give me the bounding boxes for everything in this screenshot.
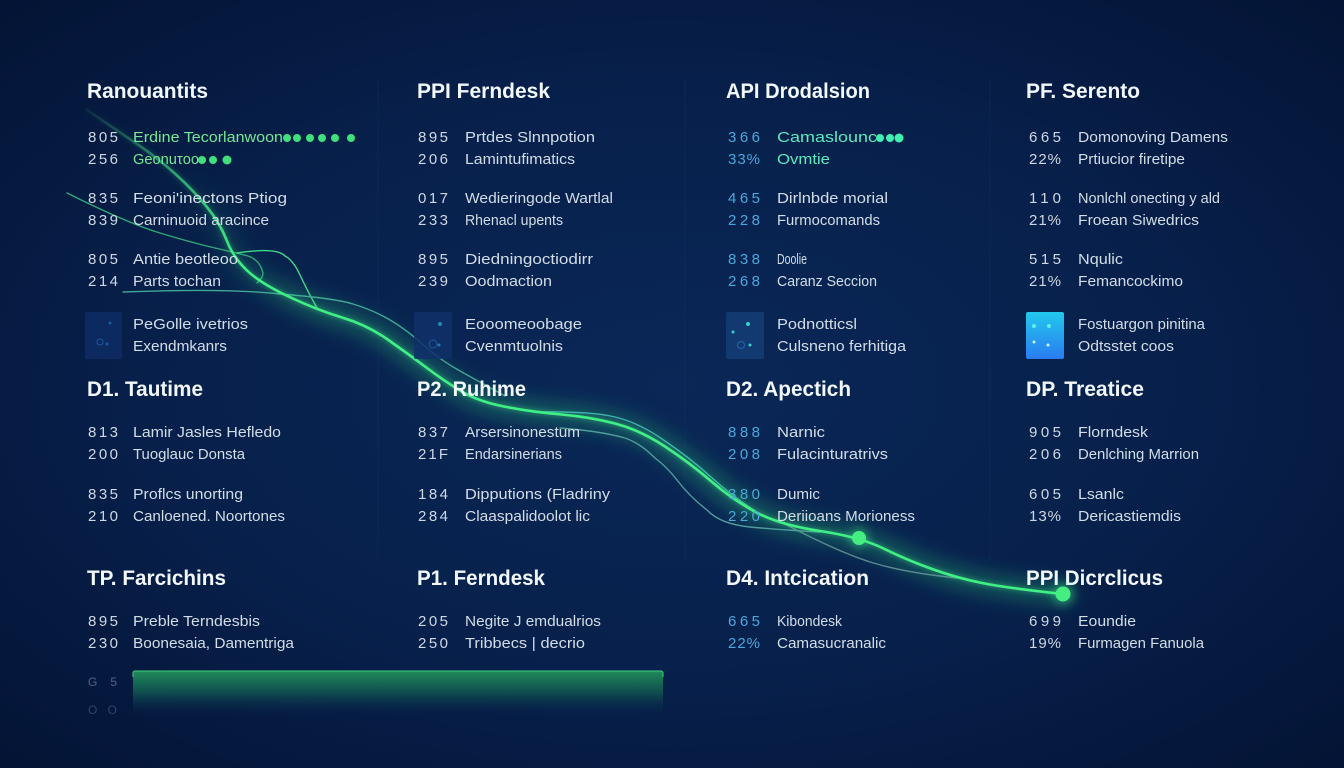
metric rows: Erdine Tecorlanwoon bbox=[133, 129, 283, 146]
metric rows: Camaslounc bbox=[777, 129, 878, 146]
panel: middle column 4 bbox=[1026, 378, 1199, 525]
main line bbox=[87, 110, 1063, 594]
metric rows: Arsersinonestum bbox=[465, 424, 580, 441]
panel: middle column 3 bbox=[726, 378, 915, 525]
icon tile bbox=[85, 312, 122, 359]
metric rows: 465 bbox=[728, 190, 760, 207]
metric rows: Doolie bbox=[777, 251, 807, 268]
heading: PF. Serento bbox=[1026, 80, 1140, 103]
metric rows: Podnotticsl bbox=[777, 316, 857, 333]
metric rows: 21F bbox=[418, 446, 448, 463]
metric rows: 380 bbox=[728, 486, 760, 503]
metric rows: Deriioans Morioness bbox=[777, 508, 915, 525]
metric rows: 268 bbox=[728, 273, 760, 290]
panel: middle column 2 bbox=[417, 378, 611, 525]
panel: bottom column 2 bbox=[417, 567, 601, 652]
heading: D1. Tautime bbox=[87, 378, 203, 401]
heading: D4. Intcication bbox=[726, 567, 869, 590]
metric rows: 665 bbox=[728, 613, 760, 630]
metric rows bbox=[88, 424, 285, 525]
metric rows: Geonuτoo bbox=[133, 151, 199, 168]
panel: top column 3 bbox=[726, 80, 907, 359]
metric rows: Nqulic bbox=[1078, 251, 1124, 268]
node: mid marker bbox=[850, 529, 868, 547]
metric rows bbox=[728, 613, 887, 652]
metric rows: 805 bbox=[88, 129, 118, 146]
green bar chart bbox=[88, 671, 663, 717]
metric rows: Camasucranalic bbox=[777, 635, 887, 652]
metric rows: 200 bbox=[88, 446, 118, 463]
metric rows: 184 bbox=[418, 486, 448, 503]
metric rows: 250 bbox=[418, 635, 448, 652]
metric rows: 233 bbox=[418, 212, 448, 229]
heading: PPI Ferndesk bbox=[417, 80, 550, 103]
metric rows: 33% bbox=[728, 151, 760, 168]
heading: TP. Farcichins bbox=[87, 567, 226, 590]
status dots bbox=[198, 134, 355, 164]
metric rows: Canloened. Noortones bbox=[133, 508, 285, 525]
metric rows: 228 bbox=[728, 212, 760, 229]
metric rows: 699 bbox=[1029, 613, 1061, 630]
metric rows: 21% bbox=[1029, 212, 1061, 229]
panel: bottom column 3 bbox=[726, 567, 887, 652]
node: end marker bbox=[1053, 584, 1073, 604]
metric rows: Domonoving Damens bbox=[1078, 129, 1228, 146]
metric rows: 19% bbox=[1029, 635, 1061, 652]
metric rows: Femancockimo bbox=[1078, 273, 1183, 290]
status dots bbox=[876, 134, 904, 142]
metric rows bbox=[1029, 424, 1199, 525]
flow lines bbox=[67, 110, 1063, 594]
metric rows: Lamir Jasles Hefledo bbox=[133, 424, 281, 441]
metric rows bbox=[418, 129, 613, 355]
main line glow bbox=[87, 110, 1063, 594]
metric rows: Prtdes Slnnpotion bbox=[465, 129, 595, 146]
metric rows: Fulacinturatrivs bbox=[777, 446, 888, 463]
metric rows: 895 bbox=[418, 129, 448, 146]
metric rows: 13% bbox=[1029, 508, 1061, 525]
metric rows: Wedieringode Wartlal bbox=[465, 190, 613, 207]
heading: Ranouantits bbox=[87, 80, 208, 103]
metric rows: Boonesaia, Damentriga bbox=[133, 635, 295, 652]
panel: top left column bbox=[85, 80, 355, 359]
green bar chart: O O bbox=[88, 703, 117, 717]
metric rows: 366 bbox=[728, 129, 760, 146]
panel: top column 2 bbox=[414, 80, 613, 359]
metric rows: 206 bbox=[418, 151, 448, 168]
metric rows: Negite J emdualrios bbox=[465, 613, 601, 630]
metric rows: Fostuargon pinitina bbox=[1078, 316, 1206, 333]
metric rows: Rhenacl upents bbox=[465, 212, 563, 229]
metric rows: Dirlnbde morial bbox=[777, 190, 888, 207]
heading: P2. Ruhime bbox=[417, 378, 526, 401]
icon tile bbox=[1026, 312, 1064, 359]
metric rows: 805 bbox=[88, 251, 118, 268]
panel: top column 4 bbox=[1026, 80, 1228, 359]
metric rows: Preble Terndesbis bbox=[133, 613, 260, 630]
metric rows: Furmocomands bbox=[777, 212, 880, 229]
metric rows: 835 bbox=[88, 486, 118, 503]
metric rows: Parts tochan bbox=[133, 273, 221, 290]
metric rows: Culsneno ferhitiga bbox=[777, 338, 907, 355]
metric rows bbox=[1029, 613, 1205, 652]
metric rows: Lamintufimatics bbox=[465, 151, 575, 168]
metric rows: Feoni'inectons Ptiog bbox=[133, 190, 287, 207]
metric rows: 813 bbox=[88, 424, 118, 441]
metric rows: Dipputions (Fladriny bbox=[465, 486, 611, 503]
metric rows: Dumic bbox=[777, 486, 820, 503]
heading: PPI Dicrclicus bbox=[1026, 567, 1163, 590]
metric rows: Exendmkanrs bbox=[133, 338, 227, 355]
metric rows: Narnic bbox=[777, 424, 826, 441]
metric rows: PeGolle ivetrios bbox=[133, 316, 248, 333]
metric rows bbox=[418, 424, 611, 525]
metric rows: 220 bbox=[728, 508, 760, 525]
metric rows: Eoundie bbox=[1078, 613, 1136, 630]
metric rows: Kibondesk bbox=[777, 613, 842, 630]
metric rows: 905 bbox=[1029, 424, 1061, 441]
metric rows: 214 bbox=[88, 273, 118, 290]
heading: DP. Treatice bbox=[1026, 378, 1144, 401]
metric rows: Froean Siwedrics bbox=[1078, 212, 1199, 229]
metric rows bbox=[88, 613, 295, 652]
metric rows: 256 bbox=[88, 151, 118, 168]
metric rows bbox=[418, 613, 601, 652]
thin secondary lines bbox=[67, 193, 957, 578]
metric rows: 839 bbox=[88, 212, 118, 229]
metric rows bbox=[1029, 129, 1228, 355]
panel: bottom column 1 bbox=[87, 567, 295, 652]
metric rows: 206 bbox=[1029, 446, 1061, 463]
metric rows: 205 bbox=[418, 613, 448, 630]
metric rows: Oodmaction bbox=[465, 273, 552, 290]
metric rows: 515 bbox=[1029, 251, 1061, 268]
metric rows: Nonlchl onecting y ald bbox=[1078, 190, 1220, 207]
metric rows: Eooomeoobage bbox=[465, 316, 582, 333]
metric rows: Tuoglauc Donsta bbox=[133, 446, 246, 463]
metric rows: 239 bbox=[418, 273, 448, 290]
metric rows bbox=[728, 424, 915, 525]
metric rows: 665 bbox=[1029, 129, 1061, 146]
metric rows: Caranz Seccion bbox=[777, 273, 877, 290]
metric rows: Prtiucior firetipe bbox=[1078, 151, 1185, 168]
metric rows: 284 bbox=[418, 508, 448, 525]
metric rows: Denlching Marrion bbox=[1078, 446, 1199, 463]
metric rows: Ovmtie bbox=[777, 151, 830, 168]
metric rows bbox=[728, 129, 907, 355]
metric rows bbox=[88, 129, 287, 355]
icon tile bbox=[414, 312, 452, 359]
heading: API Drodalsion bbox=[726, 80, 870, 103]
metric rows: 888 bbox=[728, 424, 760, 441]
metric rows: 835 bbox=[88, 190, 118, 207]
metric rows: Odtsstet coos bbox=[1078, 338, 1174, 355]
metric rows: Carninuoid aracince bbox=[133, 212, 269, 229]
metric rows: 837 bbox=[418, 424, 448, 441]
metric rows: 017 bbox=[418, 190, 448, 207]
metric rows: 21% bbox=[1029, 273, 1061, 290]
metric rows: Proflcs unorting bbox=[133, 486, 243, 503]
metric rows: 110 bbox=[1029, 190, 1061, 207]
metric rows: 605 bbox=[1029, 486, 1061, 503]
metric rows: 22% bbox=[1029, 151, 1061, 168]
metric rows: 230 bbox=[88, 635, 118, 652]
metric rows: Cvenmtuolnis bbox=[465, 338, 563, 355]
metric rows: 895 bbox=[418, 251, 448, 268]
panel: bottom column 4 bbox=[1026, 567, 1205, 652]
metric rows: 210 bbox=[88, 508, 118, 525]
green bar chart: G 5 bbox=[88, 675, 117, 689]
metric rows: 208 bbox=[728, 446, 760, 463]
metric rows: Florndesk bbox=[1078, 424, 1149, 441]
metric rows: Lsanlc bbox=[1078, 486, 1125, 503]
metric rows: Tribbecs | decrio bbox=[465, 635, 585, 652]
metric rows: Claaspalidoolot lic bbox=[465, 508, 591, 525]
metric rows: Antie beotleoo bbox=[133, 251, 238, 268]
icon tile bbox=[726, 312, 764, 359]
panel: middle column 1 bbox=[87, 378, 285, 525]
metric rows: 895 bbox=[88, 613, 118, 630]
metric rows: Endarsinerians bbox=[465, 446, 562, 463]
metric rows: 838 bbox=[728, 251, 760, 268]
metric rows: Diedningoctiodirr bbox=[465, 251, 593, 268]
metric rows: Dericastiemdis bbox=[1078, 508, 1181, 525]
main line soft bbox=[87, 110, 1063, 594]
metric rows: 22% bbox=[728, 635, 760, 652]
metric rows: Furmagen Fanuola bbox=[1078, 635, 1205, 652]
heading: D2. Apectich bbox=[726, 378, 851, 401]
heading: P1. Ferndesk bbox=[417, 567, 545, 590]
